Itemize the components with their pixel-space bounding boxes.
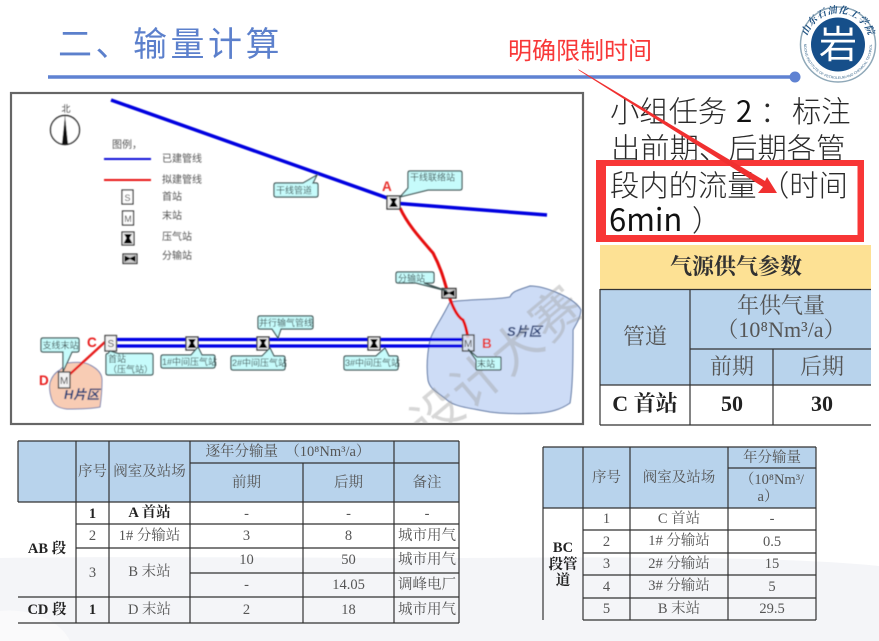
table: AB and CD segments: 备注	[412, 474, 442, 491]
background wave	[0, 557, 879, 641]
table: AB and CD segments: 序号	[78, 463, 107, 480]
table: AB and CD segments: A 首站	[128, 503, 171, 521]
table: gas supply parameters: 30	[811, 391, 833, 416]
point labels: A	[382, 179, 392, 194]
task text: 出前期、后期各管	[611, 126, 845, 168]
table: BC segment: 3# 分输站	[648, 577, 710, 594]
station D: M	[60, 376, 68, 387]
callout: trunk link station: 干线联络站	[410, 172, 455, 182]
table: AB and CD segments: 2	[89, 528, 96, 544]
station: compressor 2	[257, 337, 269, 350]
callout: 2# compressor: 2#中间压气站	[232, 357, 287, 368]
table: gas supply parameters: （10⁸Nm³/a）	[716, 317, 846, 342]
legend: 首站	[162, 190, 182, 203]
watermark: 设计大赛	[392, 267, 598, 455]
task text: 2	[736, 89, 752, 131]
station A	[387, 196, 400, 209]
table: AB and CD segments: 18	[341, 602, 356, 618]
table: gas supply parameters: 年供气量	[737, 293, 825, 318]
table: AB and CD segments: 城市用气	[398, 527, 456, 544]
callout: branch end station	[41, 338, 79, 372]
station: compressor 1	[186, 337, 198, 350]
callout: end station: 末站	[477, 358, 495, 369]
table: AB and CD segments: 调峰电厂	[398, 575, 456, 593]
legend: S	[124, 193, 131, 203]
table: BC segment: BC	[553, 540, 573, 556]
title underline	[48, 72, 800, 82]
table: BC segment: 3	[603, 556, 610, 572]
table: BC segment: a）	[758, 488, 778, 505]
arrow: note to box	[578, 69, 777, 193]
table: AB and CD segments: 8	[345, 528, 352, 544]
table: gas supply parameters: 后期	[800, 354, 844, 379]
table: AB and CD segments: 3	[243, 528, 250, 544]
table: AB and CD segments: 50	[341, 552, 356, 568]
station D	[58, 372, 70, 388]
table: gas supply parameters	[600, 245, 871, 425]
table: BC segment: 5	[768, 579, 776, 595]
table: BC segment: 1# 分输站	[648, 532, 710, 549]
table: BC segment: 4	[603, 579, 611, 595]
table: AB and CD segments: -	[425, 506, 430, 522]
table: AB and CD segments: 1	[89, 506, 96, 522]
callout: first station: 首站	[108, 353, 126, 364]
compass	[50, 104, 80, 144]
callouts	[41, 171, 501, 375]
legend: 图例，	[112, 138, 142, 151]
point labels: C	[87, 335, 97, 350]
icon: school logo: 山东石油化工学院	[802, 5, 876, 36]
task text: ：	[760, 89, 789, 131]
planned pipeline CD	[69, 342, 105, 375]
task text	[609, 89, 851, 240]
task text: ）	[692, 198, 721, 240]
table: BC segment: 年分输量	[743, 448, 801, 466]
station: distribution	[442, 288, 456, 298]
table: BC segment: 0.5	[763, 534, 781, 550]
callout: branch end station: 支线末站	[42, 340, 79, 350]
table: BC segment: 2# 分输站	[648, 555, 710, 572]
table: AB and CD segments: 逐年分输量 （10⁸Nm³/a）	[206, 442, 370, 460]
legend: M	[124, 214, 132, 224]
table: AB and CD segments: 前期	[232, 474, 261, 491]
table: BC segment: 29.5	[759, 601, 785, 617]
table: AB and CD segments: 1# 分输站	[119, 527, 180, 544]
station B	[462, 335, 474, 351]
callout: trunk link station	[400, 171, 462, 197]
callout: time limit note: 明确限制时间	[508, 31, 652, 66]
planned pipeline AB	[400, 208, 468, 338]
task text: （时间	[760, 163, 848, 205]
callout: red highlight box	[596, 160, 864, 242]
callout: parallel pipeline	[258, 316, 313, 338]
callout: first station: （压气站）	[108, 364, 153, 374]
callout: distribution station	[396, 272, 447, 291]
legend: 分输站	[162, 249, 192, 262]
callout: 3# compressor	[344, 348, 400, 370]
legend: 末站	[162, 209, 182, 222]
callout: first station	[106, 351, 153, 375]
table: BC segment: 5	[603, 601, 610, 617]
table: gas supply parameters: 气源供气参数	[670, 254, 802, 279]
task text: 标注	[792, 89, 851, 131]
callout: distribution station: 分输站	[398, 272, 425, 284]
title: 二、输量计算	[58, 17, 283, 66]
table: gas supply parameters: 管道	[623, 324, 667, 349]
legend	[104, 138, 202, 264]
table: BC segment: -	[770, 511, 775, 527]
callout: 1# compressor	[161, 347, 217, 368]
table: BC segment: （10⁸Nm³/	[740, 471, 805, 488]
table: BC segment: 阀室及站场	[643, 469, 715, 486]
table: AB and CD segments: CD 段	[27, 601, 67, 618]
table: gas supply parameters: 前期	[710, 354, 754, 379]
compass: 北	[61, 104, 71, 114]
region: H area	[50, 362, 102, 409]
table: AB and CD segments: 城市用气	[398, 601, 456, 618]
table: AB and CD segments: -	[244, 506, 249, 522]
table: BC segment: C 首站	[658, 510, 700, 527]
table: AB and CD segments	[18, 441, 459, 623]
table: BC segment: 15	[765, 556, 779, 572]
table: BC segment: 序号	[592, 469, 621, 486]
region: S area: S片区	[507, 324, 544, 339]
point labels: D	[39, 373, 49, 388]
table: BC segment: 段管	[548, 555, 578, 573]
task text: 段内的流量	[610, 163, 756, 205]
panel: pipeline map	[11, 93, 598, 455]
callout: 2# compressor	[231, 348, 287, 370]
legend: 已建管线	[162, 152, 202, 165]
table: BC segment	[543, 447, 816, 620]
existing trunk pipeline	[111, 100, 547, 215]
icon: school logo: 岩	[819, 14, 857, 69]
point labels	[39, 179, 492, 388]
table: gas supply parameters: C 首站	[612, 391, 678, 416]
table: AB and CD segments: 后期	[334, 474, 363, 491]
legend: 拟建管线	[162, 173, 202, 186]
station B: M	[464, 339, 472, 350]
table: AB and CD segments: -	[244, 577, 249, 593]
table: AB and CD segments: -	[346, 506, 351, 522]
table: BC segment: 2	[603, 534, 610, 550]
table: AB and CD segments: 3	[89, 565, 96, 581]
table: AB and CD segments: 1	[89, 602, 96, 618]
callout: end station	[468, 349, 501, 370]
parallel pipeline BC	[116, 340, 464, 346]
callout: parallel pipeline: 并行输气管线	[259, 317, 313, 328]
region: S area	[427, 286, 581, 414]
region: H area: H片区	[64, 387, 101, 402]
table: BC segment: 1	[603, 511, 610, 527]
table: BC segment: B 末站	[658, 600, 700, 617]
table: AB and CD segments: 10	[239, 552, 254, 568]
callout: 3# compressor: 3#中间压气站	[345, 357, 400, 368]
legend: 压气站	[162, 230, 192, 243]
station: compressor 3	[368, 337, 380, 350]
table: AB and CD segments: AB 段	[28, 540, 67, 557]
table: AB and CD segments: 2	[243, 602, 250, 618]
station C	[105, 336, 116, 351]
table: AB and CD segments: B 末站	[128, 563, 171, 580]
task text: 小组任务	[610, 89, 727, 131]
table: AB and CD segments: 14.05	[332, 577, 365, 593]
table: AB and CD segments: 城市用气	[398, 551, 456, 568]
table: gas supply parameters: 50	[721, 391, 743, 416]
task text: 6min	[609, 195, 682, 240]
callout: trunk pipeline	[274, 175, 318, 197]
callout: 1# compressor: 1#中间压气站	[162, 356, 217, 367]
callout: trunk pipeline: 干线管道	[276, 184, 312, 196]
station C: S	[107, 339, 114, 350]
point labels: B	[482, 336, 492, 351]
icon: school logo	[800, 5, 876, 83]
table: AB and CD segments: D 末站	[128, 601, 171, 618]
table: BC segment: 道	[556, 571, 571, 589]
table: AB and CD segments: 阀室及站场	[113, 463, 186, 480]
